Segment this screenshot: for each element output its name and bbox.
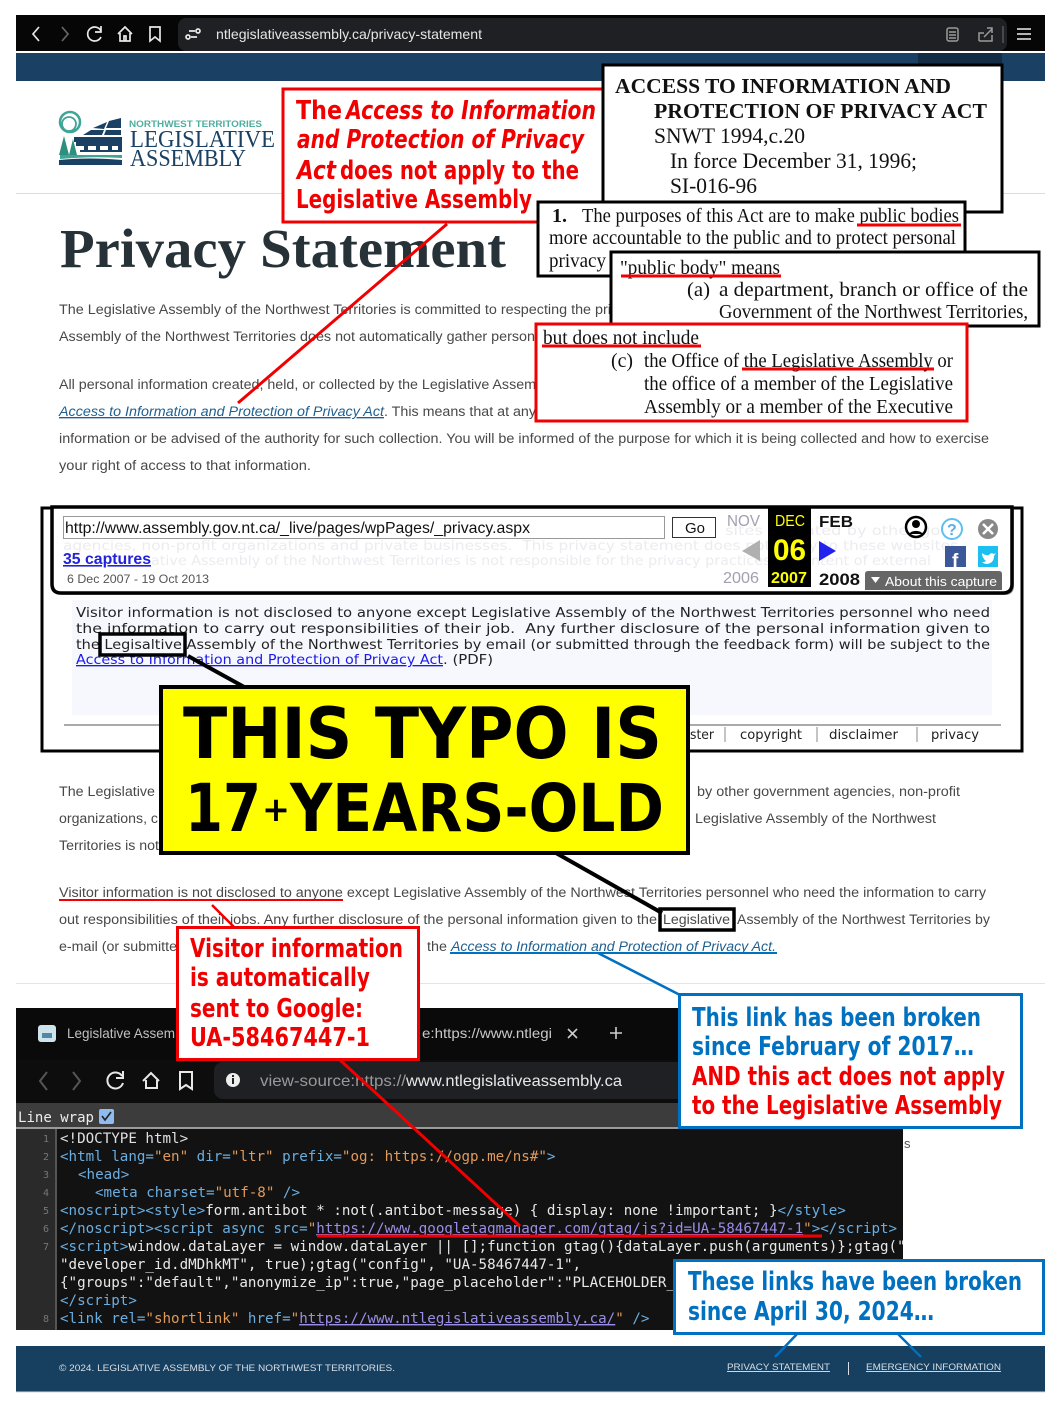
archived page body <box>72 600 992 715</box>
archived page body: Access to Information and Protection of Privacy Act <box>76 652 443 668</box>
icon: info <box>226 1073 240 1087</box>
icon: facebook <box>945 546 966 572</box>
body text: lower paragraphs: out responsibilities of their jobs. Any further disclosure of the personal information given to the <box>59 912 657 927</box>
timeline: 06 <box>773 534 806 567</box>
body text: lower paragraphs: Access to Information and Protection of Privacy Act. <box>450 939 776 954</box>
capture date range: 6 Dec 2007 - 19 Oct 2013 <box>67 572 209 586</box>
about this capture button: About this capture <box>885 574 997 589</box>
archived page body: the Legisaltive Assembly of the Northwest Territories by email (or submitted through the feedback form) will be subject to the <box>76 637 990 653</box>
line number gutter: 3 <box>43 1170 49 1181</box>
line wrap control <box>16 1103 903 1129</box>
panel: view source window <box>16 1008 906 1330</box>
line number gutter: 1 <box>43 1134 49 1145</box>
wayback toolbar: http://www.assembly.gov.nt.ca/_live/pages/wpPages/_privacy.aspx <box>65 520 530 537</box>
url input <box>64 516 664 538</box>
timeline: 2008 <box>819 570 860 589</box>
panel: but does not include: (c) <box>611 350 633 372</box>
arrow: red connectors <box>212 905 520 1226</box>
footer bar <box>16 1346 1045 1393</box>
callout: typo age: + <box>262 790 290 830</box>
panel: act title: SI-016-96 <box>670 173 757 198</box>
timeline: NOV <box>727 513 760 530</box>
title: Privacy Statement <box>60 218 507 279</box>
panel: act title: SNWT 1994,c.20 <box>654 123 805 148</box>
timeline <box>723 507 860 589</box>
icon: help: ? <box>947 522 957 539</box>
panel: public body definition: a department, branch or office of the <box>719 279 1028 301</box>
line number gutter: 2 <box>43 1152 49 1163</box>
body text: intro: . This means that at any <box>384 404 536 419</box>
panel: act title <box>603 65 1002 212</box>
faint page text behind toolbar <box>63 523 963 569</box>
timeline: 2007 <box>771 570 807 587</box>
logo wordmark <box>129 119 275 172</box>
body text: intro: The Legislative Assembly of the Northwest Territories is committed to respecting the pri <box>59 302 611 317</box>
callout: broken act link <box>680 994 1022 1128</box>
body text: lower paragraphs: Visitor information is not disclosed to anyone except Legislative Assembly of the Northwest Territories personnel who need the information to carry <box>59 885 986 900</box>
icon: close <box>978 519 998 539</box>
source code: </script> <box>60 1293 137 1309</box>
line number gutter: 6 <box>43 1224 49 1235</box>
panel: public body definition <box>611 252 1039 326</box>
source code <box>60 1131 906 1327</box>
site navigation band <box>16 53 1045 81</box>
tab bar: Legislative Assem <box>67 1025 175 1041</box>
archived page footer links <box>64 724 1001 743</box>
arrow: blue connector to act link <box>598 953 682 996</box>
body text: intro: information or be advised of the authority for such collection. You will be informed of the purpose for which it is being collected and how to exercise <box>59 431 989 446</box>
icon: help <box>942 519 962 539</box>
logo wordmark: NORTHWEST TERRITORIES <box>129 119 262 130</box>
timeline: FEB <box>819 514 853 531</box>
callout: act does not apply: Access to Information <box>344 96 596 126</box>
panel: act title: In force December 31, 1996; <box>670 148 917 173</box>
body text: lower paragraphs: the <box>427 939 447 954</box>
body text: intro: Assembly of the Northwest Territories does not automatically gather person <box>59 329 535 344</box>
second typo highlight <box>660 909 734 930</box>
timeline: 2006 <box>723 570 759 587</box>
panel: but does not include: the office of a member of the Legislative <box>644 373 953 395</box>
panel: purposes of the act <box>538 202 965 276</box>
arrow: red connector to act link <box>238 224 447 403</box>
footer bar: EMERGENCY INFORMATION <box>866 1362 1001 1373</box>
callout: typo age: 17 <box>185 770 261 847</box>
archived page body: . (PDF) <box>443 652 493 668</box>
body text: intro <box>58 302 989 473</box>
panel: purposes of the act: more accountable to the public and to protect personal <box>549 227 956 249</box>
browser address bar <box>16 15 1045 51</box>
footer bar: © 2024. LEGISLATIVE ASSEMBLY OF THE NORTHWEST TERRITORIES. <box>59 1363 395 1374</box>
faint page text behind toolbar: ative Assembly of the Northwest Territories is not responsible for the privacy practices or content of external <box>151 553 931 569</box>
footer bar: PRIVACY STATEMENT <box>727 1362 830 1373</box>
source address bar: www.ntlegislativeassembly.ca <box>405 1073 622 1090</box>
body text: lower paragraphs: Territories is not <box>59 838 159 853</box>
callout: typo age: THIS TYPO IS <box>183 693 662 775</box>
archived page body: Visitor information is not disclosed to anyone except Legislative Assembly of the Northwest Territories personnel who need <box>76 605 990 621</box>
tab bar <box>16 1008 903 1060</box>
callout: broken act link: since February of 2017… <box>692 1032 974 1062</box>
panel: but does not include: but does not include <box>543 327 699 349</box>
line wrap control: Line wrap <box>18 1110 94 1126</box>
body text: lower paragraphs: The Legislative <box>59 784 155 799</box>
wayback toolbar <box>52 507 1014 595</box>
about this capture button <box>865 571 1002 590</box>
panel: but does not include <box>536 324 967 421</box>
logo wordmark: ASSEMBLY <box>130 146 246 172</box>
callout: act does not apply: and Protection of Privacy <box>297 125 585 155</box>
typo highlight <box>100 634 185 655</box>
timeline: DEC <box>775 513 805 530</box>
archived page footer links: privacy <box>931 727 979 743</box>
icon: twitter <box>978 546 998 567</box>
panel: purposes of the act: 1. <box>552 205 567 227</box>
archived page footer links: ster <box>690 727 714 743</box>
callout: typo age <box>161 687 688 853</box>
panel: wayback machine capture <box>42 507 1022 751</box>
faint text beside source window: s <box>904 1136 911 1151</box>
arrow: typo connectors <box>188 656 662 913</box>
body text: lower paragraphs: Assembly of the Northwest Territories by <box>737 912 990 927</box>
callout: act does not apply <box>283 89 608 222</box>
icon: logo emblem <box>59 112 122 165</box>
body text: intro: Access to Information and Protection of Privacy Act <box>58 404 385 419</box>
source code: <head> <box>78 1167 129 1183</box>
source code: <link rel="shortlink" href="https://www.ntlegislativeassembly.ca/" /> <box>60 1311 649 1327</box>
go button: Go <box>685 520 705 537</box>
body text: intro: All personal information created, held, or collected by the Legislative Assem <box>59 377 536 392</box>
panel: act title: ACCESS TO INFORMATION AND <box>615 74 951 98</box>
icon: toolbar actions <box>947 26 1031 43</box>
source address bar <box>16 1060 903 1103</box>
source code: "developer_id.dMDhkMT", true);gtag("config", "UA-58467447-1", <box>60 1257 581 1273</box>
captures link: 35 captures <box>63 551 151 568</box>
body text: lower paragraphs: by other government agencies, non-profit <box>697 784 960 799</box>
source code: <script>window.dataLayer = window.dataLayer || [];function gtag(){dataLayer.push(arguments)};gtag(" <box>60 1239 906 1255</box>
body text: lower paragraphs: Legislative <box>663 912 730 927</box>
source code: <html lang="en" dir="ltr" prefix="og: https://ogp.me/ns#"> <box>60 1149 555 1165</box>
callout: visitor information: sent to Google: <box>190 994 363 1024</box>
faint page text behind toolbar: sites operated by other gov <box>725 523 950 539</box>
source address bar: view-source:https:// <box>260 1073 407 1090</box>
logo wordmark: LEGISLATIVE <box>130 127 275 153</box>
panel: purposes of the act: privacy <box>549 250 606 272</box>
callout: act does not apply: The <box>296 96 342 126</box>
panel: purposes of the act: The purposes of this Act are to make public bodies <box>582 205 959 227</box>
url: ntlegislativeassembly.ca/privacy-statement <box>216 26 482 42</box>
go button <box>672 518 716 538</box>
source code: {"groups":"default","anonymize_ip":true,"page_placeholder":"PLACEHOLDER_ <box>60 1275 675 1291</box>
body text: intro: your right of access to that information. <box>59 458 311 473</box>
panel: public body definition: "public body" means <box>620 257 780 279</box>
source code: <noscript><style>form.antibot * :not(.antibot-message) { display: none !important; }</style> <box>60 1203 846 1219</box>
archived page footer links: copyright <box>740 727 802 743</box>
icon: browser navigation <box>33 26 200 41</box>
archived page footer links: disclaimer <box>829 727 898 743</box>
body text: lower paragraphs <box>59 784 990 954</box>
logo <box>59 112 275 172</box>
faint page text behind toolbar: agencies, non-profit organizations and private businesses. This privacy statement does not apply to these websites. <box>63 538 963 554</box>
line number gutter: 7 <box>43 1242 49 1253</box>
source code: <!DOCTYPE html> <box>60 1131 188 1147</box>
callout: act does not apply: does not apply to the <box>340 156 579 186</box>
icon: facebook: f <box>952 551 959 572</box>
callout: broken links since 2024: since April 30, 2024… <box>688 1297 934 1327</box>
archived page body: the information to carry out responsibilities of their job. Any further disclosure of the personal information given to <box>76 621 990 637</box>
body text: lower paragraphs: Legislative Assembly of the Northwest <box>695 811 936 826</box>
body text: lower paragraphs: organizations, c <box>59 811 158 826</box>
callout: typo age: YEARS-OLD <box>289 770 664 847</box>
panel: public body definition: Government of the Northwest Territories, <box>719 301 1028 323</box>
callout: broken act link: This link has been broken <box>692 1003 981 1033</box>
line number gutter: 4 <box>43 1188 49 1199</box>
source code: </noscript><script async src="https://www.googletagmanager.com/gtag/js?id=UA-58467447-1"></script> <box>60 1221 897 1237</box>
panel: but does not include: Assembly or a member of the Executive <box>644 396 953 418</box>
source code: <meta charset="utf-8" /> <box>95 1185 300 1201</box>
icon: source navigation <box>40 1071 192 1090</box>
tab bar: e:https://www.ntlegi <box>422 1025 552 1041</box>
callout: visitor information <box>178 928 418 1060</box>
callout: act does not apply: Act <box>295 156 337 186</box>
callout: visitor information: UA-58467447-1 <box>190 1023 370 1053</box>
line number gutter: 8 <box>43 1314 49 1325</box>
line number gutter <box>16 1129 57 1330</box>
arrow: blue connectors to footer links <box>775 1333 921 1357</box>
callout: visitor information: is automatically <box>190 963 370 993</box>
line number gutter: 5 <box>43 1206 49 1217</box>
icon: user <box>906 517 926 537</box>
panel: but does not include: the Office of the Legislative Assembly or <box>644 350 953 372</box>
body text: lower paragraphs: e-mail (or submitte <box>59 939 177 954</box>
callout: broken links since 2024 <box>674 1260 1044 1334</box>
panel: act title: PROTECTION OF PRIVACY ACT <box>654 99 987 123</box>
panel: public body definition: (a) <box>687 279 710 301</box>
callout: visitor information: Visitor information <box>190 934 403 964</box>
callout: act does not apply: Legislative Assembly <box>296 185 532 215</box>
